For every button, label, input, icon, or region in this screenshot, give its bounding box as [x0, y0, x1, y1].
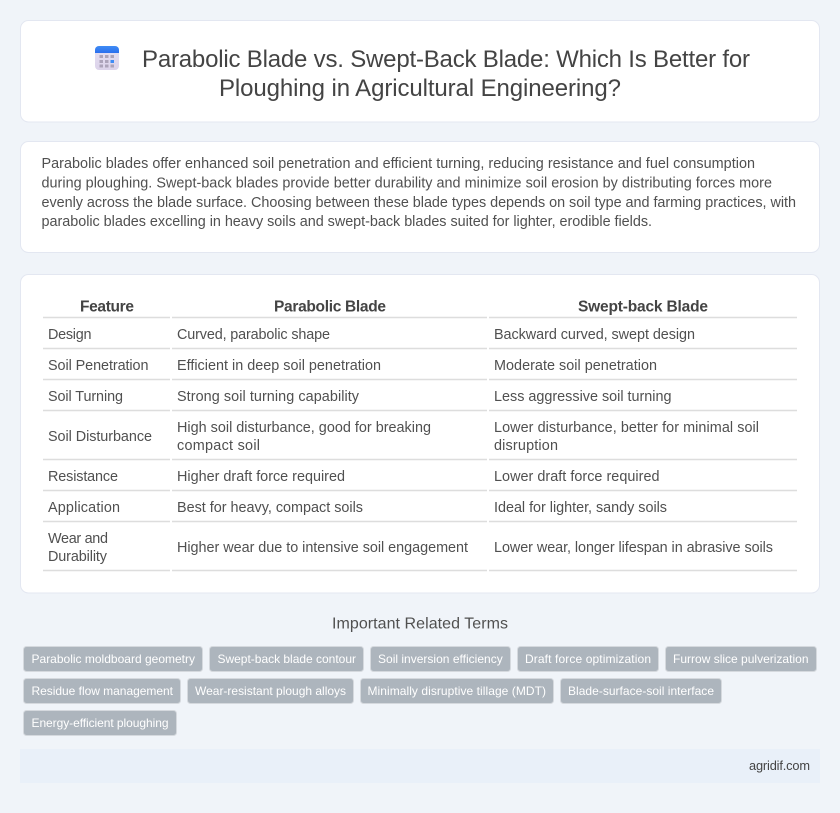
row: soil turning: Soil Turning — [48, 389, 123, 405]
row: application: Ideal for lighter, sandy soils — [494, 500, 667, 516]
row: soil disturbance — [43, 420, 797, 460]
row: wear and durability: Higher wear due to intensive soil engagement — [177, 540, 468, 556]
row: soil disturbance: disruption — [494, 438, 558, 454]
row: soil turning: Less aggressive soil turning — [494, 389, 672, 405]
panel: related term tags: Draft force optimization — [525, 652, 651, 666]
row: application — [43, 500, 797, 522]
table header row — [43, 298, 797, 318]
panel: related term tags: Energy-efficient ploughing — [32, 716, 168, 730]
panel: related term tags: Furrow slice pulverization — [673, 652, 808, 666]
panel: comparison table — [20, 274, 820, 593]
panel: related term tags: Parabolic moldboard geometry — [32, 652, 195, 666]
title — [142, 46, 750, 102]
row: design: Curved, parabolic shape — [177, 327, 330, 343]
row: wear and durability — [43, 531, 797, 570]
row: application: Application — [48, 500, 120, 516]
row: soil penetration: Moderate soil penetration — [494, 358, 657, 374]
table header row: Swept-back Blade — [578, 298, 708, 316]
row: wear and durability: Wear and — [48, 531, 108, 547]
panel: summary paragraph: Parabolic blades offer enhanced soil penetration and efficient turning, reducing resistance and fuel consumption — [42, 156, 755, 172]
row: soil turning — [43, 389, 797, 410]
panel: summary paragraph: during ploughing. Swept-back blades provide better durability and minimize soil erosion by distributing forces more — [42, 175, 772, 191]
row: soil penetration: Soil Penetration — [48, 358, 148, 374]
row: resistance — [43, 469, 797, 490]
row: soil penetration — [43, 358, 797, 380]
row: soil disturbance: High soil disturbance, good for breaking — [177, 420, 431, 436]
row: soil disturbance: compact soil — [177, 438, 260, 454]
panel: summary paragraph: parabolic blades excelling in heavy soils and swept-back blades suited for lighter, erodible fields. — [42, 214, 652, 230]
row: resistance: Lower draft force required — [494, 469, 660, 485]
panel: related term tags: Swept-back blade contour — [218, 652, 356, 666]
table header row: Parabolic Blade — [274, 298, 386, 316]
title: Ploughing in Agricultural Engineering? — [219, 75, 621, 102]
heading: important related terms: Important Related Terms — [332, 616, 508, 632]
row: resistance: Higher draft force required — [177, 469, 345, 485]
row: soil turning: Strong soil turning capability — [177, 389, 360, 405]
panel: related term tags: Soil inversion efficiency — [378, 652, 503, 666]
panel: summary paragraph — [20, 142, 820, 252]
row: resistance: Resistance — [48, 469, 118, 485]
row: design: Design — [48, 327, 92, 343]
panel: related term tags: Minimally disruptive tillage (MDT) — [368, 684, 546, 698]
row: soil disturbance: Lower disturbance, better for minimal soil — [494, 420, 759, 436]
row: design — [43, 327, 797, 348]
row: soil penetration: Efficient in deep soil penetration — [177, 358, 381, 374]
panel: related term tags: Residue flow management — [32, 684, 174, 698]
footer — [20, 749, 820, 783]
footer: agridif.com — [749, 758, 810, 773]
row: design: Backward curved, swept design — [494, 327, 695, 343]
row: application: Best for heavy, compact soils — [177, 500, 363, 516]
table header row: Feature — [80, 298, 134, 316]
panel: related term tags: Wear-resistant plough alloys — [195, 684, 346, 698]
row: soil disturbance: Soil Disturbance — [48, 429, 152, 445]
panel: summary paragraph: evenly across the blade surface. Choosing between these blade types depends on soil type and farming practices, with — [42, 195, 796, 211]
row: wear and durability: Lower wear, longer lifespan in abrasive soils — [494, 540, 773, 556]
panel: header — [20, 20, 820, 122]
panel: related term tags: Blade-surface-soil interface — [568, 684, 714, 698]
panel: related term tags — [24, 646, 816, 736]
row: wear and durability: Durability — [48, 549, 108, 565]
icon: calendar — [95, 46, 119, 70]
title: Parabolic Blade vs. Swept-Back Blade: Which Is Better for — [142, 46, 750, 73]
